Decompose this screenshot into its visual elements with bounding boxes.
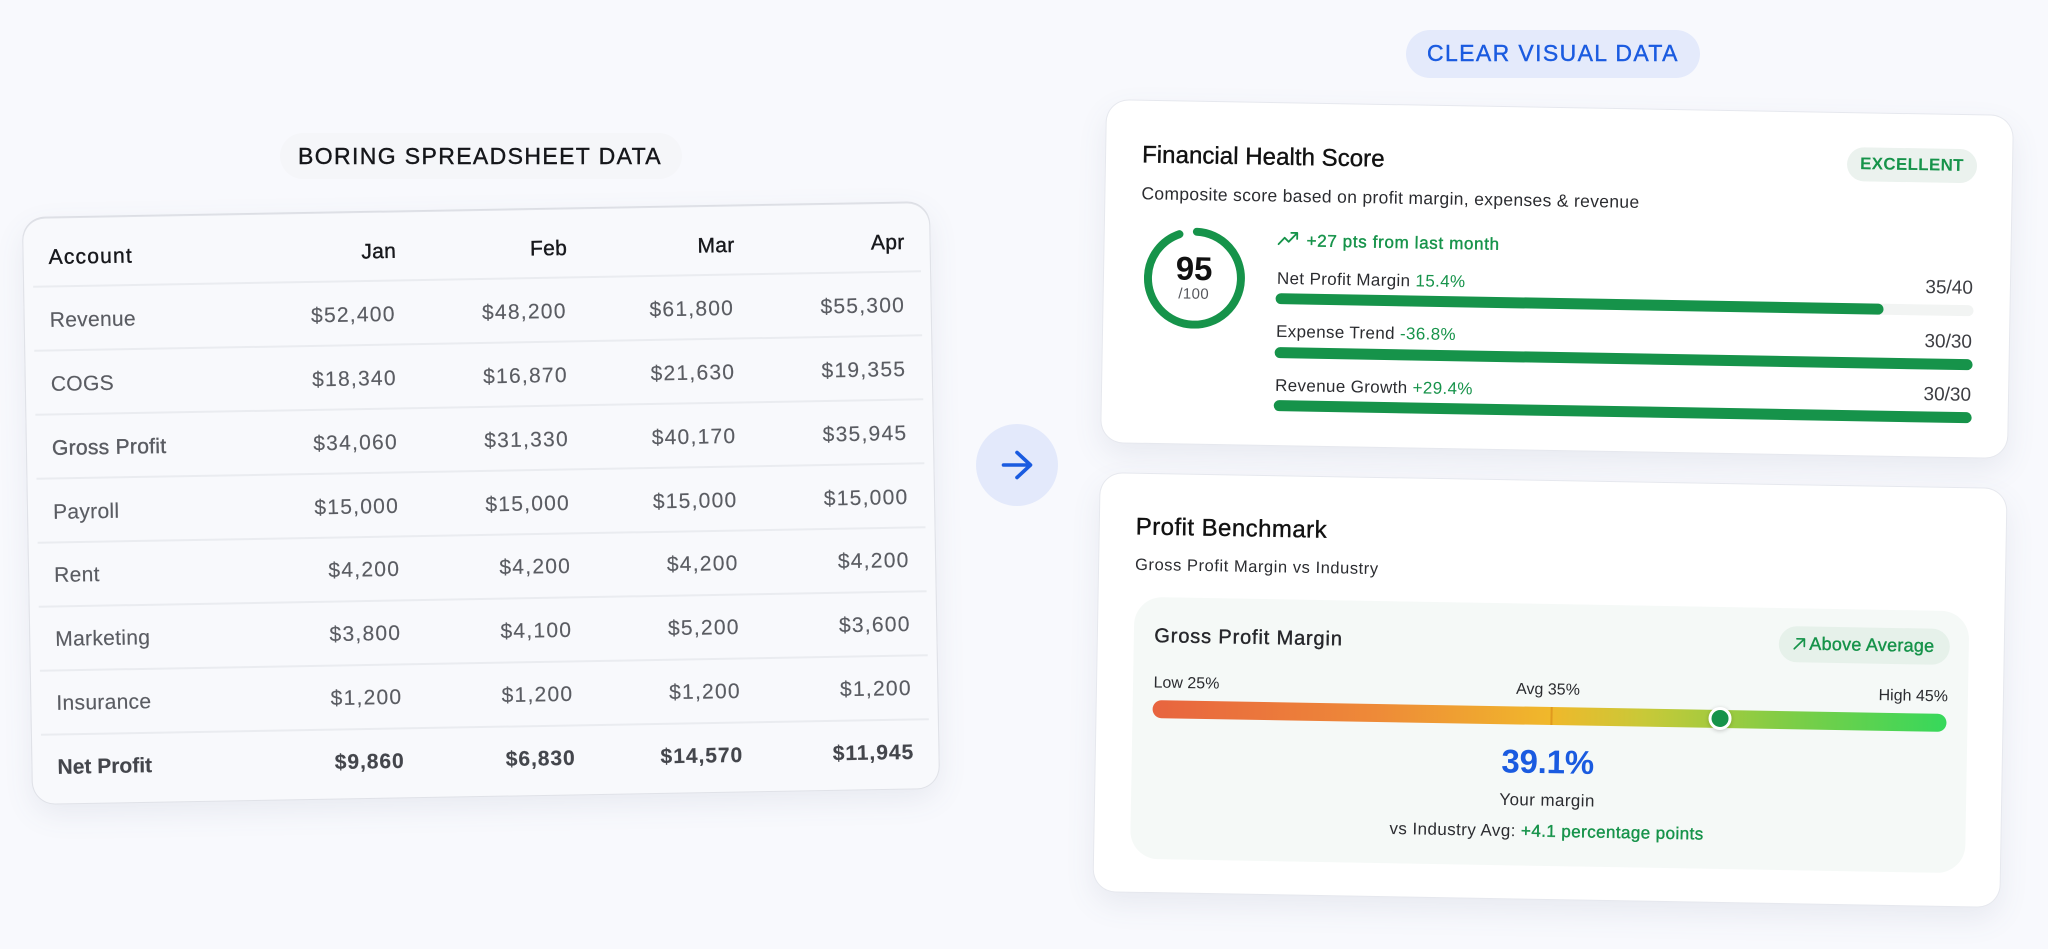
card subtitle: Composite score based on profit margin, expenses & revenue <box>1141 182 1640 211</box>
panel: spreadsheet table <box>23 203 939 803</box>
row: cogs: $16,870 <box>483 363 568 388</box>
row: marketing: $5,200 <box>668 615 740 640</box>
row: rent: $4,200 <box>667 551 739 576</box>
row: net profit: $14,570 <box>660 743 743 767</box>
row: rent: $4,200 <box>499 554 571 579</box>
scale label: high: High 45% <box>1878 686 1948 704</box>
table header row: Mar <box>697 233 735 257</box>
card title: Financial Health Score <box>1142 141 1385 172</box>
trend text: +27 pts from last month <box>1306 230 1500 253</box>
row: insurance: $1,200 <box>840 676 912 701</box>
row: revenue <box>50 293 905 331</box>
label: your margin: Your margin <box>1499 789 1595 810</box>
row: cogs: COGS <box>51 371 114 395</box>
row: payroll: Payroll <box>53 499 120 523</box>
panel: financial health score card <box>1101 100 2013 457</box>
row: gross profit: $34,060 <box>313 430 398 454</box>
metric: expense trend: 30/30 <box>1924 330 1972 352</box>
metric: net profit margin <box>1276 268 1974 316</box>
row: marketing <box>55 612 911 650</box>
gauge bar <box>1152 699 1947 731</box>
row: net profit: Net Profit <box>57 753 152 778</box>
score ring 95/100 <box>1144 228 1245 329</box>
row: cogs: $21,630 <box>650 360 735 385</box>
row: payroll: $15,000 <box>485 491 570 515</box>
row: net profit: $9,860 <box>335 749 405 773</box>
gauge heading: Gross Profit Margin <box>1154 624 1343 649</box>
metric: net profit margin: 35/40 <box>1925 277 1973 298</box>
row: insurance: $1,200 <box>330 685 403 710</box>
row: cogs <box>51 357 906 395</box>
row: gross profit: $40,170 <box>652 424 737 448</box>
icon: trending up <box>1278 232 1298 246</box>
metric: expense trend <box>1274 321 1973 370</box>
table header row <box>48 230 905 268</box>
row: revenue: $52,400 <box>311 302 396 327</box>
row: insurance: $1,200 <box>669 679 741 704</box>
comparison text: vs Industry Avg: +4.1 percentage points <box>1389 819 1704 843</box>
row: payroll: $15,000 <box>824 485 909 509</box>
score ring 95/100: /100 <box>1178 284 1209 302</box>
metric: expense trend: Expense Trend -36.8% <box>1276 321 1456 344</box>
score ring 95/100: 95 <box>1175 249 1213 286</box>
row: payroll <box>53 485 909 523</box>
card subtitle: Gross Profit Margin vs Industry <box>1135 555 1379 577</box>
table header row: Jan <box>361 239 396 263</box>
table header row: Feb <box>530 236 567 260</box>
row: net profit: $6,830 <box>506 746 576 770</box>
arrow: from spreadsheet to visual data <box>976 424 1058 506</box>
panel: profit benchmark card <box>1093 473 2007 906</box>
row: rent: Rent <box>54 563 100 586</box>
table header row: Apr <box>871 230 905 254</box>
row: cogs: $18,340 <box>312 366 397 391</box>
scale label: low: Low 25% <box>1153 673 1220 692</box>
metric: revenue growth: Revenue Growth +29.4% <box>1275 375 1473 397</box>
badge: above average: Above Average <box>1809 633 1935 655</box>
row: marketing: $3,600 <box>839 612 911 637</box>
row: revenue: Revenue <box>50 307 136 331</box>
badge: excellent: EXCELLENT <box>1860 154 1964 174</box>
row: rent: $4,200 <box>838 548 910 573</box>
row: rent: $4,200 <box>328 557 400 582</box>
row: marketing: $4,100 <box>500 618 572 643</box>
row: revenue: $61,800 <box>649 296 734 321</box>
badge: excellent <box>1847 147 1977 183</box>
table header row: Account <box>48 244 133 268</box>
metric: revenue growth <box>1274 375 1972 424</box>
value: 39.1%: 39.1% <box>1501 742 1594 780</box>
scale label: average: Avg 35% <box>1516 680 1580 698</box>
row: insurance <box>56 676 912 714</box>
metric: revenue growth: 30/30 <box>1923 384 1971 405</box>
gauge marker <box>1708 706 1731 730</box>
card title: Profit Benchmark <box>1136 512 1327 543</box>
row: payroll: $15,000 <box>653 488 738 512</box>
row: payroll: $15,000 <box>314 494 399 518</box>
row: revenue: $55,300 <box>820 293 905 318</box>
row: marketing: Marketing <box>55 626 150 650</box>
heading pill: boring spreadsheet data: BORING SPREADSHEET DATA <box>298 143 662 169</box>
row: rent <box>54 548 910 586</box>
row: marketing: $3,800 <box>329 621 401 646</box>
row: insurance: Insurance <box>56 690 152 714</box>
row: net profit <box>57 740 914 778</box>
inner panel: gross profit margin gauge <box>1130 596 1969 872</box>
row: cogs: $19,355 <box>821 357 906 382</box>
heading pill: boring spreadsheet data <box>280 133 682 179</box>
row: revenue: $48,200 <box>482 299 567 324</box>
row: net profit: $11,945 <box>832 740 914 764</box>
row: gross profit: $31,330 <box>484 427 569 451</box>
row: insurance: $1,200 <box>501 682 574 707</box>
heading pill: clear visual data <box>1406 30 1700 78</box>
heading pill: clear visual data: CLEAR VISUAL DATA <box>1427 40 1679 66</box>
row: gross profit: Gross Profit <box>52 434 167 459</box>
row: gross profit: $35,945 <box>822 421 908 445</box>
badge: above average <box>1778 625 1950 664</box>
row: gross profit <box>52 421 908 459</box>
metric: net profit margin: Net Profit Margin 15.4% <box>1277 268 1466 290</box>
